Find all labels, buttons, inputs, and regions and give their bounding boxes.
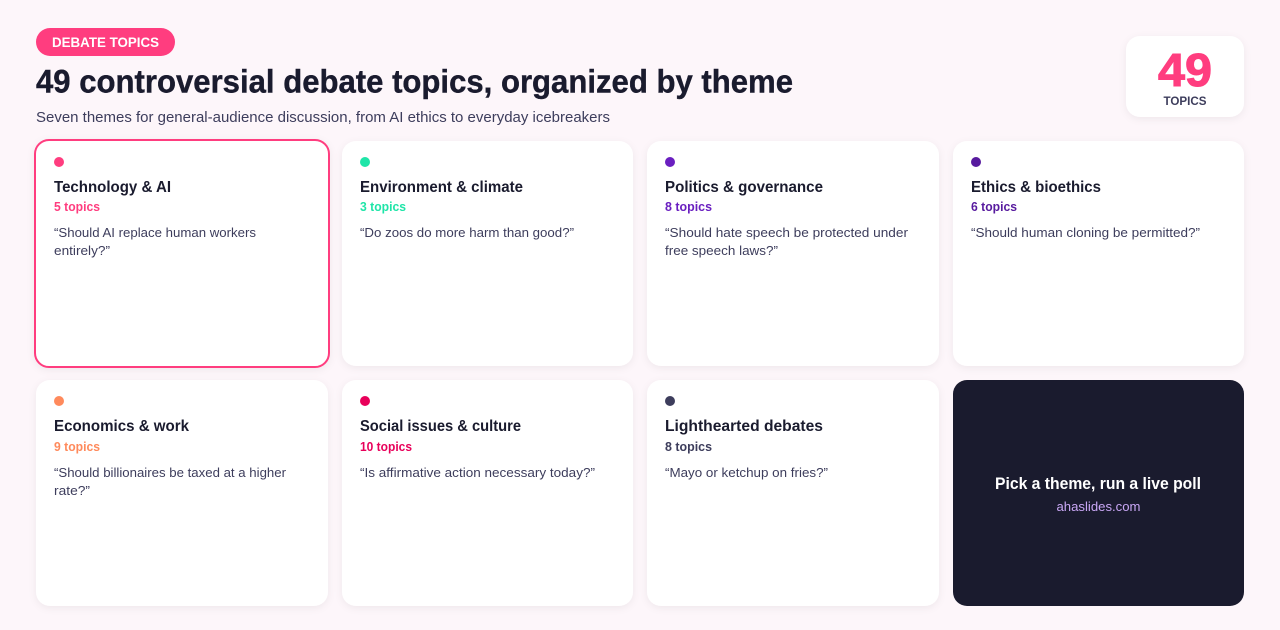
panel: ethics and bioethics bbox=[953, 141, 1244, 366]
heading: social issues and culture: Social issues & culture bbox=[360, 418, 521, 435]
call to action heading: Pick a theme, run a live poll bbox=[995, 475, 1201, 493]
topic count: 5 topics bbox=[54, 200, 100, 214]
sample question: “Do zoos do more harm than good?” bbox=[360, 225, 574, 240]
icon: slate dot bbox=[665, 396, 675, 406]
heading: technology and AI: Technology & AI bbox=[54, 179, 171, 196]
sample question: “Should billionaires be taxed at a higher bbox=[54, 465, 287, 480]
panel: environment and climate bbox=[342, 141, 633, 366]
heading: environment and climate: Environment & climate bbox=[360, 179, 523, 196]
title: 49 controversial debate topics, organized by theme bbox=[36, 64, 793, 100]
icon: green dot bbox=[360, 157, 370, 167]
topic count: 3 topics bbox=[360, 200, 406, 214]
sample question: free speech laws?” bbox=[665, 243, 778, 258]
sample question bbox=[665, 225, 909, 258]
icon: crimson dot bbox=[360, 396, 370, 406]
topic count: 8 topics bbox=[665, 200, 712, 214]
panel: social issues and culture bbox=[342, 380, 633, 606]
icon: orange dot bbox=[54, 396, 64, 406]
panel: technology and AI bbox=[35, 140, 329, 367]
stat card: 49 topics bbox=[1126, 36, 1244, 117]
stat card: 49 topics: 49 bbox=[1158, 44, 1212, 96]
panel: call to action bbox=[953, 380, 1244, 606]
sample question: entirely?” bbox=[54, 243, 110, 258]
topic count: 9 topics bbox=[54, 440, 100, 454]
sample question: “Is affirmative action necessary today?” bbox=[360, 465, 595, 480]
topic count: 6 topics bbox=[971, 200, 1017, 214]
heading: ethics and bioethics: Ethics & bioethics bbox=[971, 179, 1101, 196]
topic count: 8 topics bbox=[665, 440, 712, 454]
heading: lighthearted debates: Lighthearted debates bbox=[665, 418, 823, 435]
heading: politics and governance: Politics & governance bbox=[665, 179, 823, 196]
sample question: rate?” bbox=[54, 483, 90, 498]
badge: debate topics: DEBATE TOPICS bbox=[52, 35, 159, 50]
sample question: “Mayo or ketchup on fries?” bbox=[665, 465, 828, 480]
icon: pink dot bbox=[54, 157, 64, 167]
sample question bbox=[54, 465, 287, 498]
sample question: “Should hate speech be protected under bbox=[665, 225, 909, 240]
topic count: 10 topics bbox=[360, 440, 412, 454]
panel: economics and work bbox=[36, 380, 328, 606]
stat card: 49 topics: TOPICS bbox=[1164, 96, 1207, 108]
icon: purple dot bbox=[665, 157, 675, 167]
subtitle: Seven themes for general-audience discussion, from AI ethics to everyday icebreakers bbox=[36, 110, 610, 126]
sample question bbox=[54, 225, 257, 258]
icon: violet dot bbox=[971, 157, 981, 167]
heading: economics and work: Economics & work bbox=[54, 418, 189, 435]
badge: debate topics bbox=[36, 28, 175, 56]
panel: politics and governance bbox=[647, 141, 939, 366]
sample question: “Should human cloning be permitted?” bbox=[971, 225, 1200, 240]
panel: lighthearted debates bbox=[647, 380, 939, 606]
sample question: “Should AI replace human workers bbox=[54, 225, 257, 240]
website link: ahaslides.com bbox=[1056, 499, 1140, 514]
